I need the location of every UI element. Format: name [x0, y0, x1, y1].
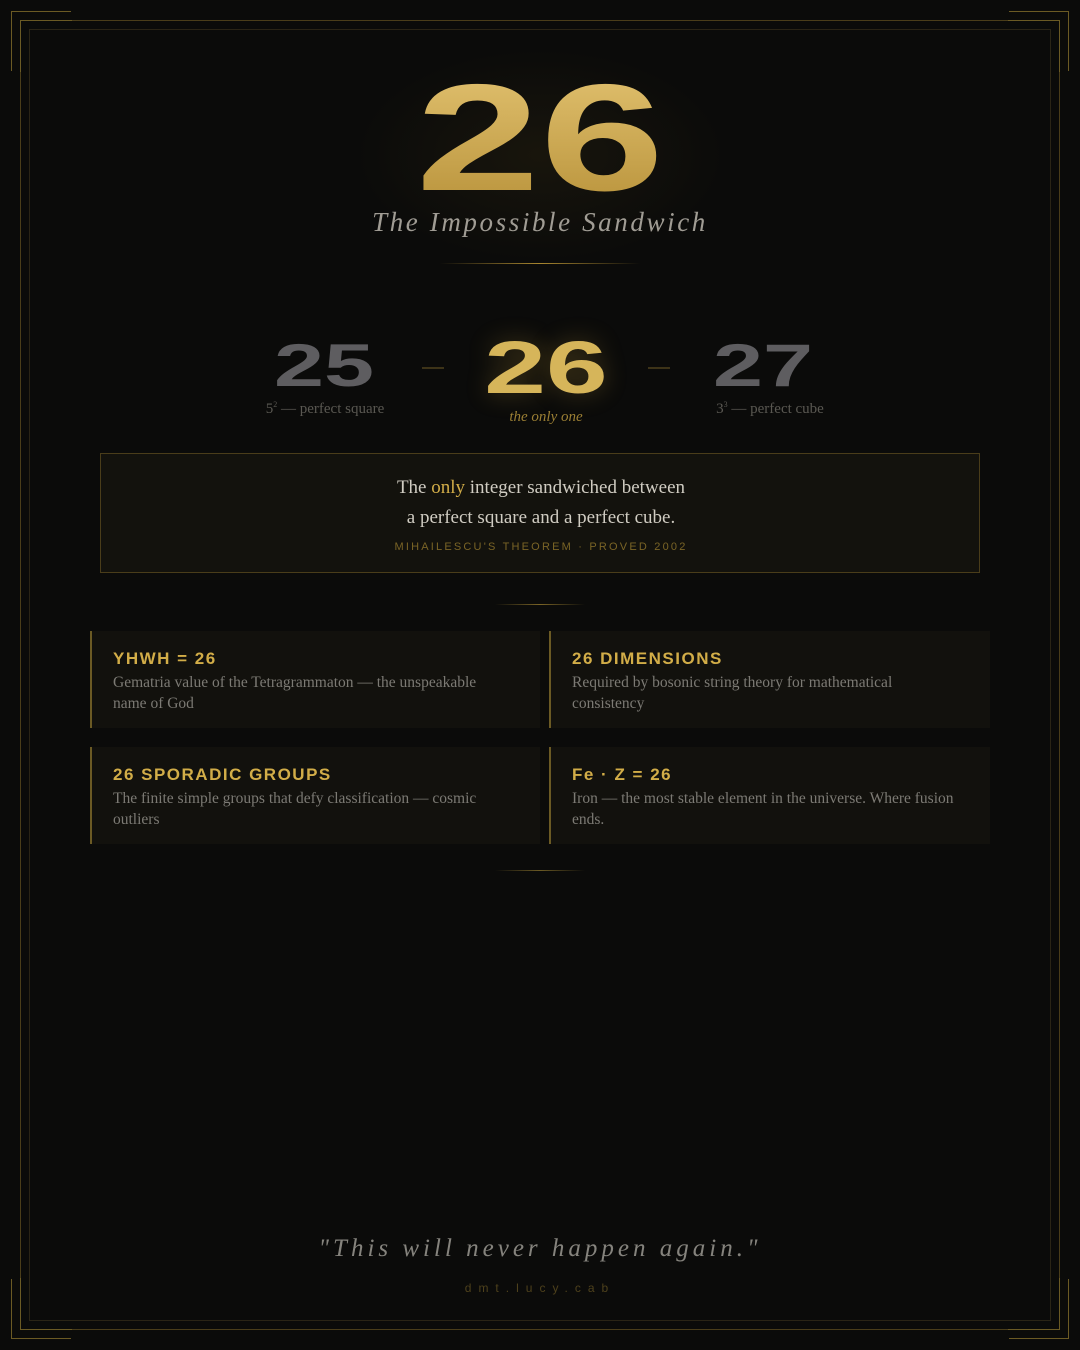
divider [495, 604, 585, 605]
number 25: 25 [274, 332, 374, 399]
theorem box [100, 453, 980, 573]
card: sporadic [90, 747, 540, 844]
statement: The only integer sandwiched between [397, 477, 685, 498]
card: iron [549, 747, 990, 844]
number 26 center: 26 [484, 326, 608, 409]
card: dimensions: Required by bosonic string theory for mathematical consistency [572, 674, 892, 712]
card: sporadic: The finite simple groups that defy classification — cosmic outliers [113, 790, 476, 828]
label 27: 33 — perfect cube [716, 400, 824, 417]
divider [440, 263, 640, 264]
divider [495, 870, 585, 871]
background glow [340, 40, 740, 270]
number 27: 27 [713, 332, 813, 399]
statement [397, 477, 685, 528]
statement: a perfect square and a perfect cube. [407, 507, 675, 528]
card: YHWH: Gematria value of the Tetragrammaton — the unspeakable name of God [113, 674, 476, 712]
hero number 26 [246, 62, 834, 214]
hero number 26: 26 [416, 53, 664, 223]
dash right [648, 367, 670, 369]
footer url: dmt.lucy.cab [465, 1281, 615, 1295]
caption: MIHAILESCU'S THEOREM · PROVED 2002 [394, 541, 688, 553]
quote: "This will never happen again." [319, 1235, 761, 1262]
card: dimensions [549, 631, 990, 728]
corner brackets [12, 12, 72, 72]
card: sporadic: 26 SPORADIC GROUPS [113, 765, 332, 784]
card: YHWH: YHWH = 26 [113, 649, 217, 668]
dash left [422, 367, 444, 369]
sandwich row [266, 326, 824, 425]
title subtitle: The Impossible Sandwich [372, 207, 708, 237]
label the only one: the only one [509, 409, 583, 425]
card: iron: Iron — the most stable element in the universe. Where fusion ends. [572, 790, 954, 828]
label 25: 52 — perfect square [266, 400, 384, 417]
card: dimensions: 26 DIMENSIONS [572, 649, 723, 668]
card: YHWH [90, 631, 540, 728]
card: iron: Fe · Z = 26 [572, 765, 672, 784]
